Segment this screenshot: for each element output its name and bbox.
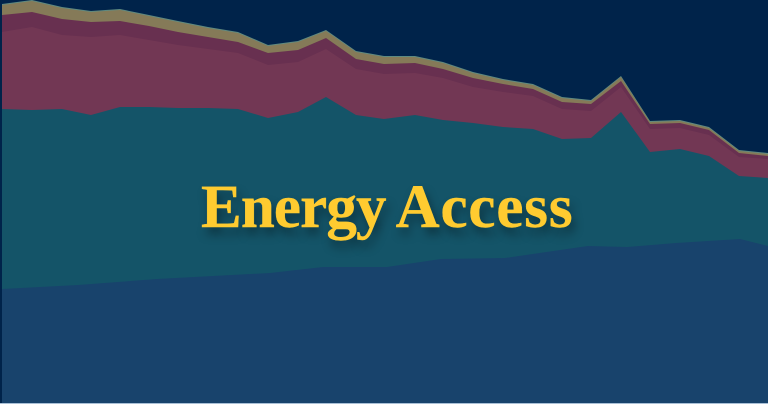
- bottom edge strip: [0, 403, 768, 404]
- area: blue layer: [2, 239, 768, 404]
- title: Energy Access: [201, 174, 573, 241]
- area: teal layer: [2, 97, 768, 404]
